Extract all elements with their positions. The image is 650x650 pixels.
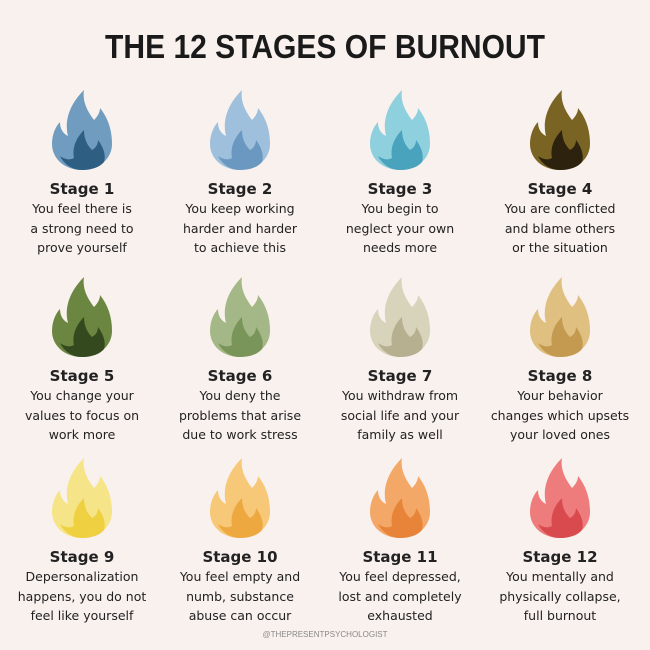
- stage 2: harder and harder: [183, 220, 297, 236]
- stage 12: full burnout: [524, 608, 596, 623]
- stage 1: You feel there is: [32, 201, 132, 216]
- stage 3: Stage 3: [368, 180, 432, 198]
- stage 11: Stage 11: [362, 548, 438, 566]
- stage 7: family as well: [357, 427, 443, 442]
- stage 7: [341, 277, 460, 442]
- stage 4: [504, 90, 615, 255]
- stage 8: Your behavior: [517, 388, 603, 403]
- stage 4: or the situation: [512, 240, 608, 255]
- stage 6: problems that arise: [179, 408, 301, 422]
- stage 8: Stage 8: [528, 367, 592, 385]
- title: THE 12 STAGES OF BURNOUT: [105, 28, 545, 65]
- stage 5: You change your: [30, 388, 134, 403]
- stage 6: Stage 6: [208, 367, 272, 385]
- stage 1: Stage 1: [50, 180, 114, 198]
- stage 11: lost and completely: [338, 588, 462, 604]
- stage 4: and blame others: [505, 220, 615, 236]
- stage 2: [183, 90, 297, 255]
- stage 5: work more: [49, 427, 115, 442]
- stage 10: Stage 10: [202, 548, 278, 566]
- stage 9: Stage 9: [50, 548, 114, 566]
- stage 12: physically collapse,: [499, 588, 621, 604]
- stage 6: [179, 277, 301, 442]
- stage 1: prove yourself: [37, 240, 127, 255]
- stage 1: a strong need to: [30, 220, 134, 236]
- stage 7: You withdraw from: [342, 388, 458, 403]
- stage 5: [25, 277, 139, 442]
- stage 8: your loved ones: [510, 427, 610, 442]
- stage 9: feel like yourself: [31, 608, 133, 623]
- stage 10: numb, substance: [186, 588, 294, 604]
- stage 7: social life and your: [341, 408, 459, 422]
- stage 10: You feel empty and: [180, 569, 300, 584]
- footer credit: @THEPRESENTPSYCHOLOGIST: [262, 630, 388, 639]
- stage 3: You begin to: [362, 201, 438, 216]
- stage 12: Stage 12: [522, 548, 598, 566]
- stage 11: You feel depressed,: [339, 569, 461, 584]
- stage 11: exhausted: [367, 608, 433, 623]
- stage 9: happens, you do not: [18, 588, 146, 604]
- stage 4: Stage 4: [528, 180, 592, 198]
- stage 10: abuse can occur: [189, 608, 291, 623]
- stage 6: due to work stress: [182, 427, 298, 442]
- stage 6: You deny the: [200, 388, 280, 403]
- stage 2: Stage 2: [208, 180, 272, 198]
- stage 12: You mentally and: [506, 569, 614, 584]
- stage 3: needs more: [363, 240, 437, 255]
- stage 11: [338, 458, 462, 623]
- stage 3: [346, 90, 454, 255]
- stage 7: Stage 7: [368, 367, 432, 385]
- stage 12: [499, 458, 621, 623]
- stage 5: values to focus on: [25, 408, 139, 422]
- stage 5: Stage 5: [50, 367, 114, 385]
- stage 4: You are conflicted: [505, 201, 615, 216]
- stage 9: [18, 458, 146, 623]
- stage 10: [180, 458, 300, 623]
- stage 2: to achieve this: [194, 240, 286, 255]
- stage 1: [30, 90, 134, 255]
- stage 3: neglect your own: [346, 220, 454, 236]
- stage 8: [491, 277, 629, 442]
- stage 2: You keep working: [185, 201, 295, 216]
- stage 8: changes which upsets: [491, 408, 629, 422]
- stage 9: Depersonalization: [26, 569, 138, 584]
